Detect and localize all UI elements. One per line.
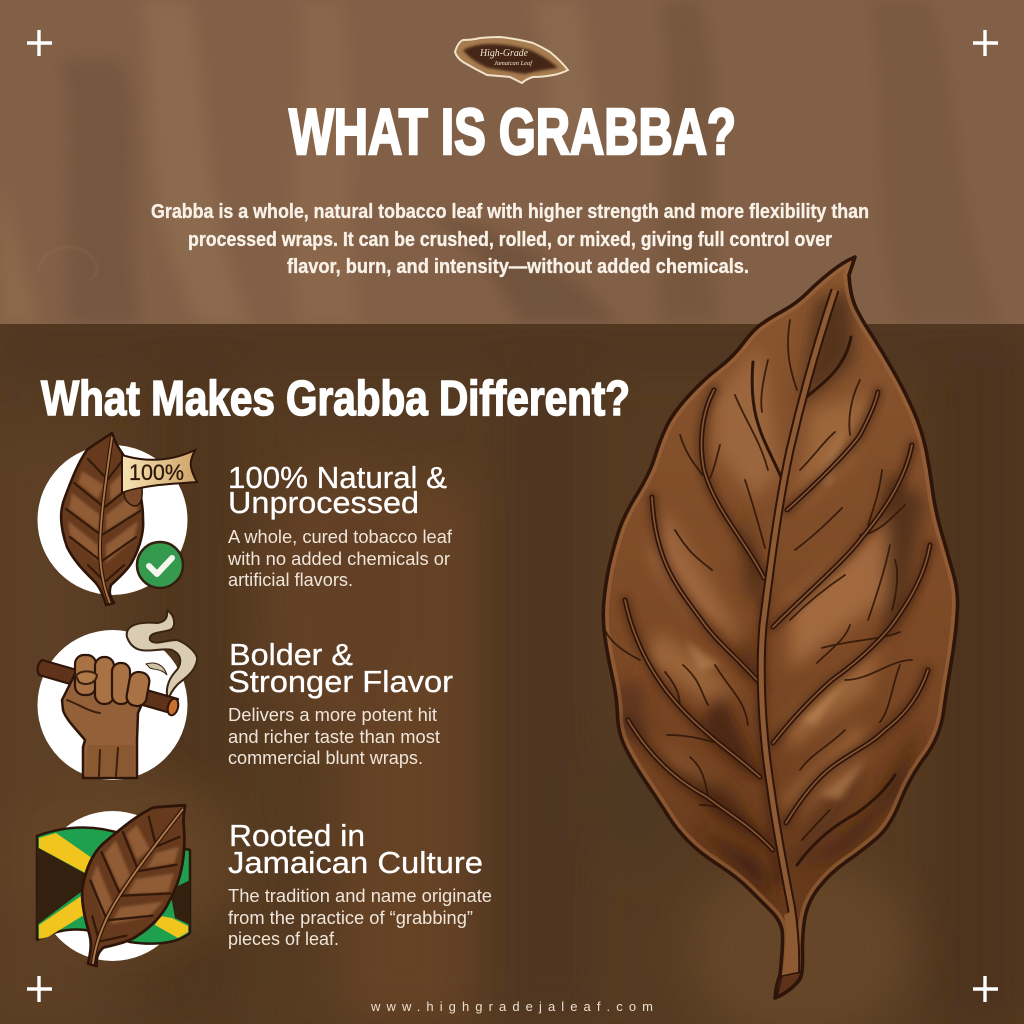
leaf shading	[606, 290, 925, 905]
text: flavor: and richer taste than most	[228, 727, 440, 747]
heading: natural: Unprocessed	[228, 485, 419, 520]
intro paragraph: Grabba is a whole, natural tobacco leaf with higher strength and more flexibility than	[151, 200, 869, 223]
logo: Jamaica shaped badge	[455, 37, 568, 83]
fist	[62, 672, 148, 778]
intro paragraph: processed wraps. It can be crushed, rolled, or mixed, giving full control over	[188, 228, 832, 251]
section heading: What Makes Grabba Different?	[41, 372, 630, 426]
icon: natural leaf with 100% banner and check	[38, 433, 197, 605]
leaf rim	[603, 257, 958, 998]
text: natural	[227, 527, 453, 590]
logo: Jamaica shaped badge: High-Grade	[479, 48, 529, 59]
icon: Jamaican flag with leaf	[37, 778, 214, 983]
text: natural: artificial flavors.	[228, 570, 353, 590]
heading: flavor: Stronger Flavor	[228, 664, 453, 699]
text: natural: A whole, cured tobacco leaf	[228, 527, 453, 547]
text: culture	[228, 886, 492, 949]
intro paragraph: flavor, burn, and intensity—without added chemicals.	[287, 255, 749, 278]
text: flavor: commercial blunt wraps.	[228, 748, 423, 768]
text: flavor: Delivers a more potent hit	[228, 705, 437, 725]
heading: natural	[228, 460, 447, 520]
smoke	[127, 610, 197, 700]
text: natural: with no added chemicals or	[227, 549, 450, 569]
leaf	[46, 778, 214, 983]
text: flavor	[228, 705, 440, 768]
title: WHAT IS GRABBA?	[289, 95, 736, 168]
midrib and stem	[761, 290, 835, 985]
text: culture: pieces of leaf.	[228, 929, 339, 949]
logo: Jamaica shaped badge: Jamaican Leaf	[494, 60, 533, 67]
heading: culture: Jamaican Culture	[228, 845, 483, 880]
icon: fist holding cigar with smoke	[38, 610, 197, 780]
vein shadows	[625, 390, 930, 880]
heading: culture	[228, 818, 483, 880]
top band	[0, 0, 1024, 324]
text: culture: The tradition and name originate	[228, 886, 492, 906]
heading: flavor: Bolder &	[229, 637, 353, 672]
footer url: www.highgradejaleaf.com	[370, 999, 653, 1014]
icon: natural leaf with 100% banner and check: 100%	[129, 460, 184, 485]
heading: natural: 100% Natural &	[228, 460, 447, 495]
flag	[37, 828, 190, 944]
big tobacco leaf	[603, 257, 958, 998]
text: culture: from the practice of “grabbing”	[228, 908, 473, 928]
secondary veins	[606, 320, 912, 840]
heading: flavor	[228, 637, 453, 699]
intro paragraph	[151, 200, 869, 278]
heading: culture: Rooted in	[229, 818, 365, 853]
cigar	[38, 660, 178, 714]
main veins	[625, 337, 930, 865]
